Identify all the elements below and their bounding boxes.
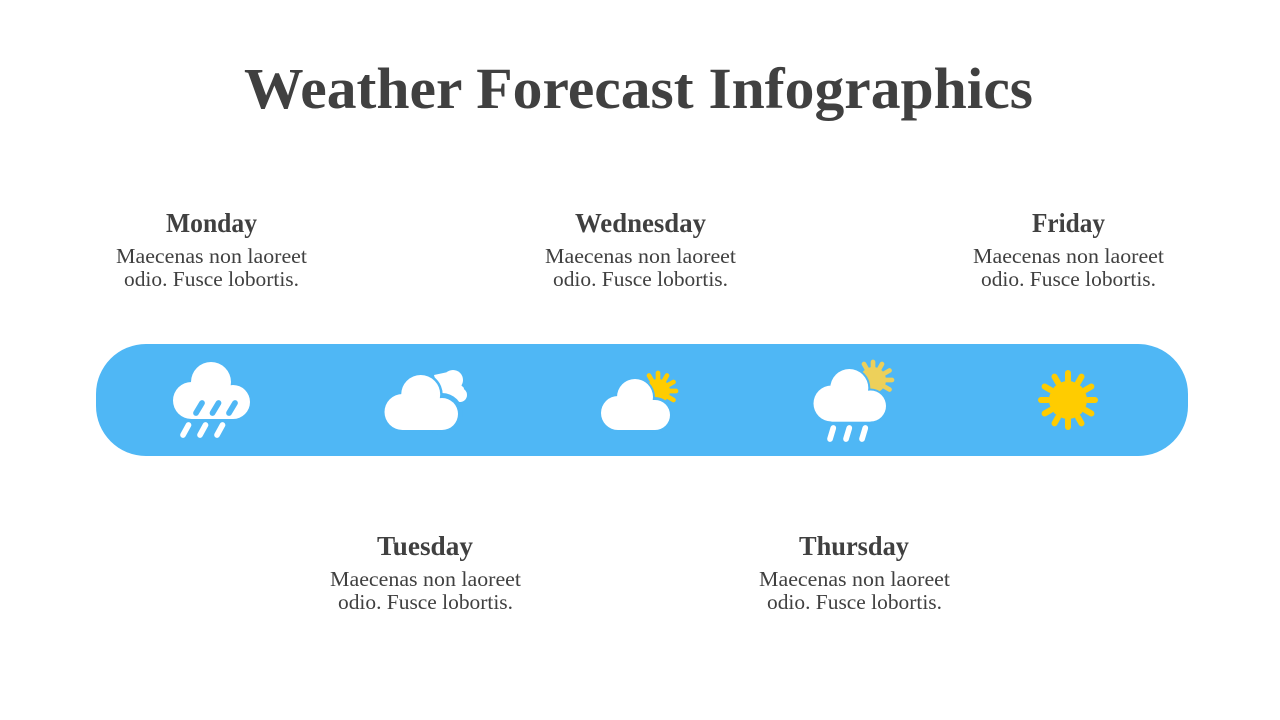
text block: Thursday	[759, 531, 950, 614]
weather band	[96, 344, 1188, 456]
text block: Tuesday: Maecenas non laoreet	[330, 567, 521, 591]
text block: Friday: odio. Fusce lobortis.	[981, 267, 1156, 291]
text block: Monday: odio. Fusce lobortis.	[124, 267, 299, 291]
text block: Thursday: odio. Fusce lobortis.	[767, 590, 942, 614]
icon: sun (Friday)	[1041, 373, 1095, 427]
text block: Thursday: Thursday	[799, 531, 909, 561]
icon: sun behind cloud (Wednesday)	[601, 373, 676, 433]
icon: rain cloud (Monday)	[173, 362, 250, 435]
text block: Friday: Friday	[1032, 208, 1105, 238]
text block: Wednesday	[545, 208, 736, 291]
text block: Thursday: Maecenas non laoreet	[759, 567, 950, 591]
icon: double cloud (Tuesday)	[384, 370, 467, 435]
text block: Tuesday	[330, 531, 521, 614]
text block: Monday: Monday	[166, 208, 257, 238]
text block: Friday: Maecenas non laoreet	[973, 244, 1164, 268]
text block: Tuesday: Tuesday	[377, 531, 473, 561]
icon: rain cloud with sun (Thursday)	[814, 362, 892, 439]
text block: Wednesday: Wednesday	[575, 208, 706, 238]
text block: Monday: Maecenas non laoreet	[116, 244, 307, 268]
text block: Friday	[973, 208, 1164, 291]
text block: Wednesday: odio. Fusce lobortis.	[553, 267, 728, 291]
text block: Tuesday: odio. Fusce lobortis.	[338, 590, 513, 614]
text block: Wednesday: Maecenas non laoreet	[545, 244, 736, 268]
title: Weather Forecast Infographics	[244, 56, 1033, 121]
text block: Monday	[116, 208, 307, 291]
